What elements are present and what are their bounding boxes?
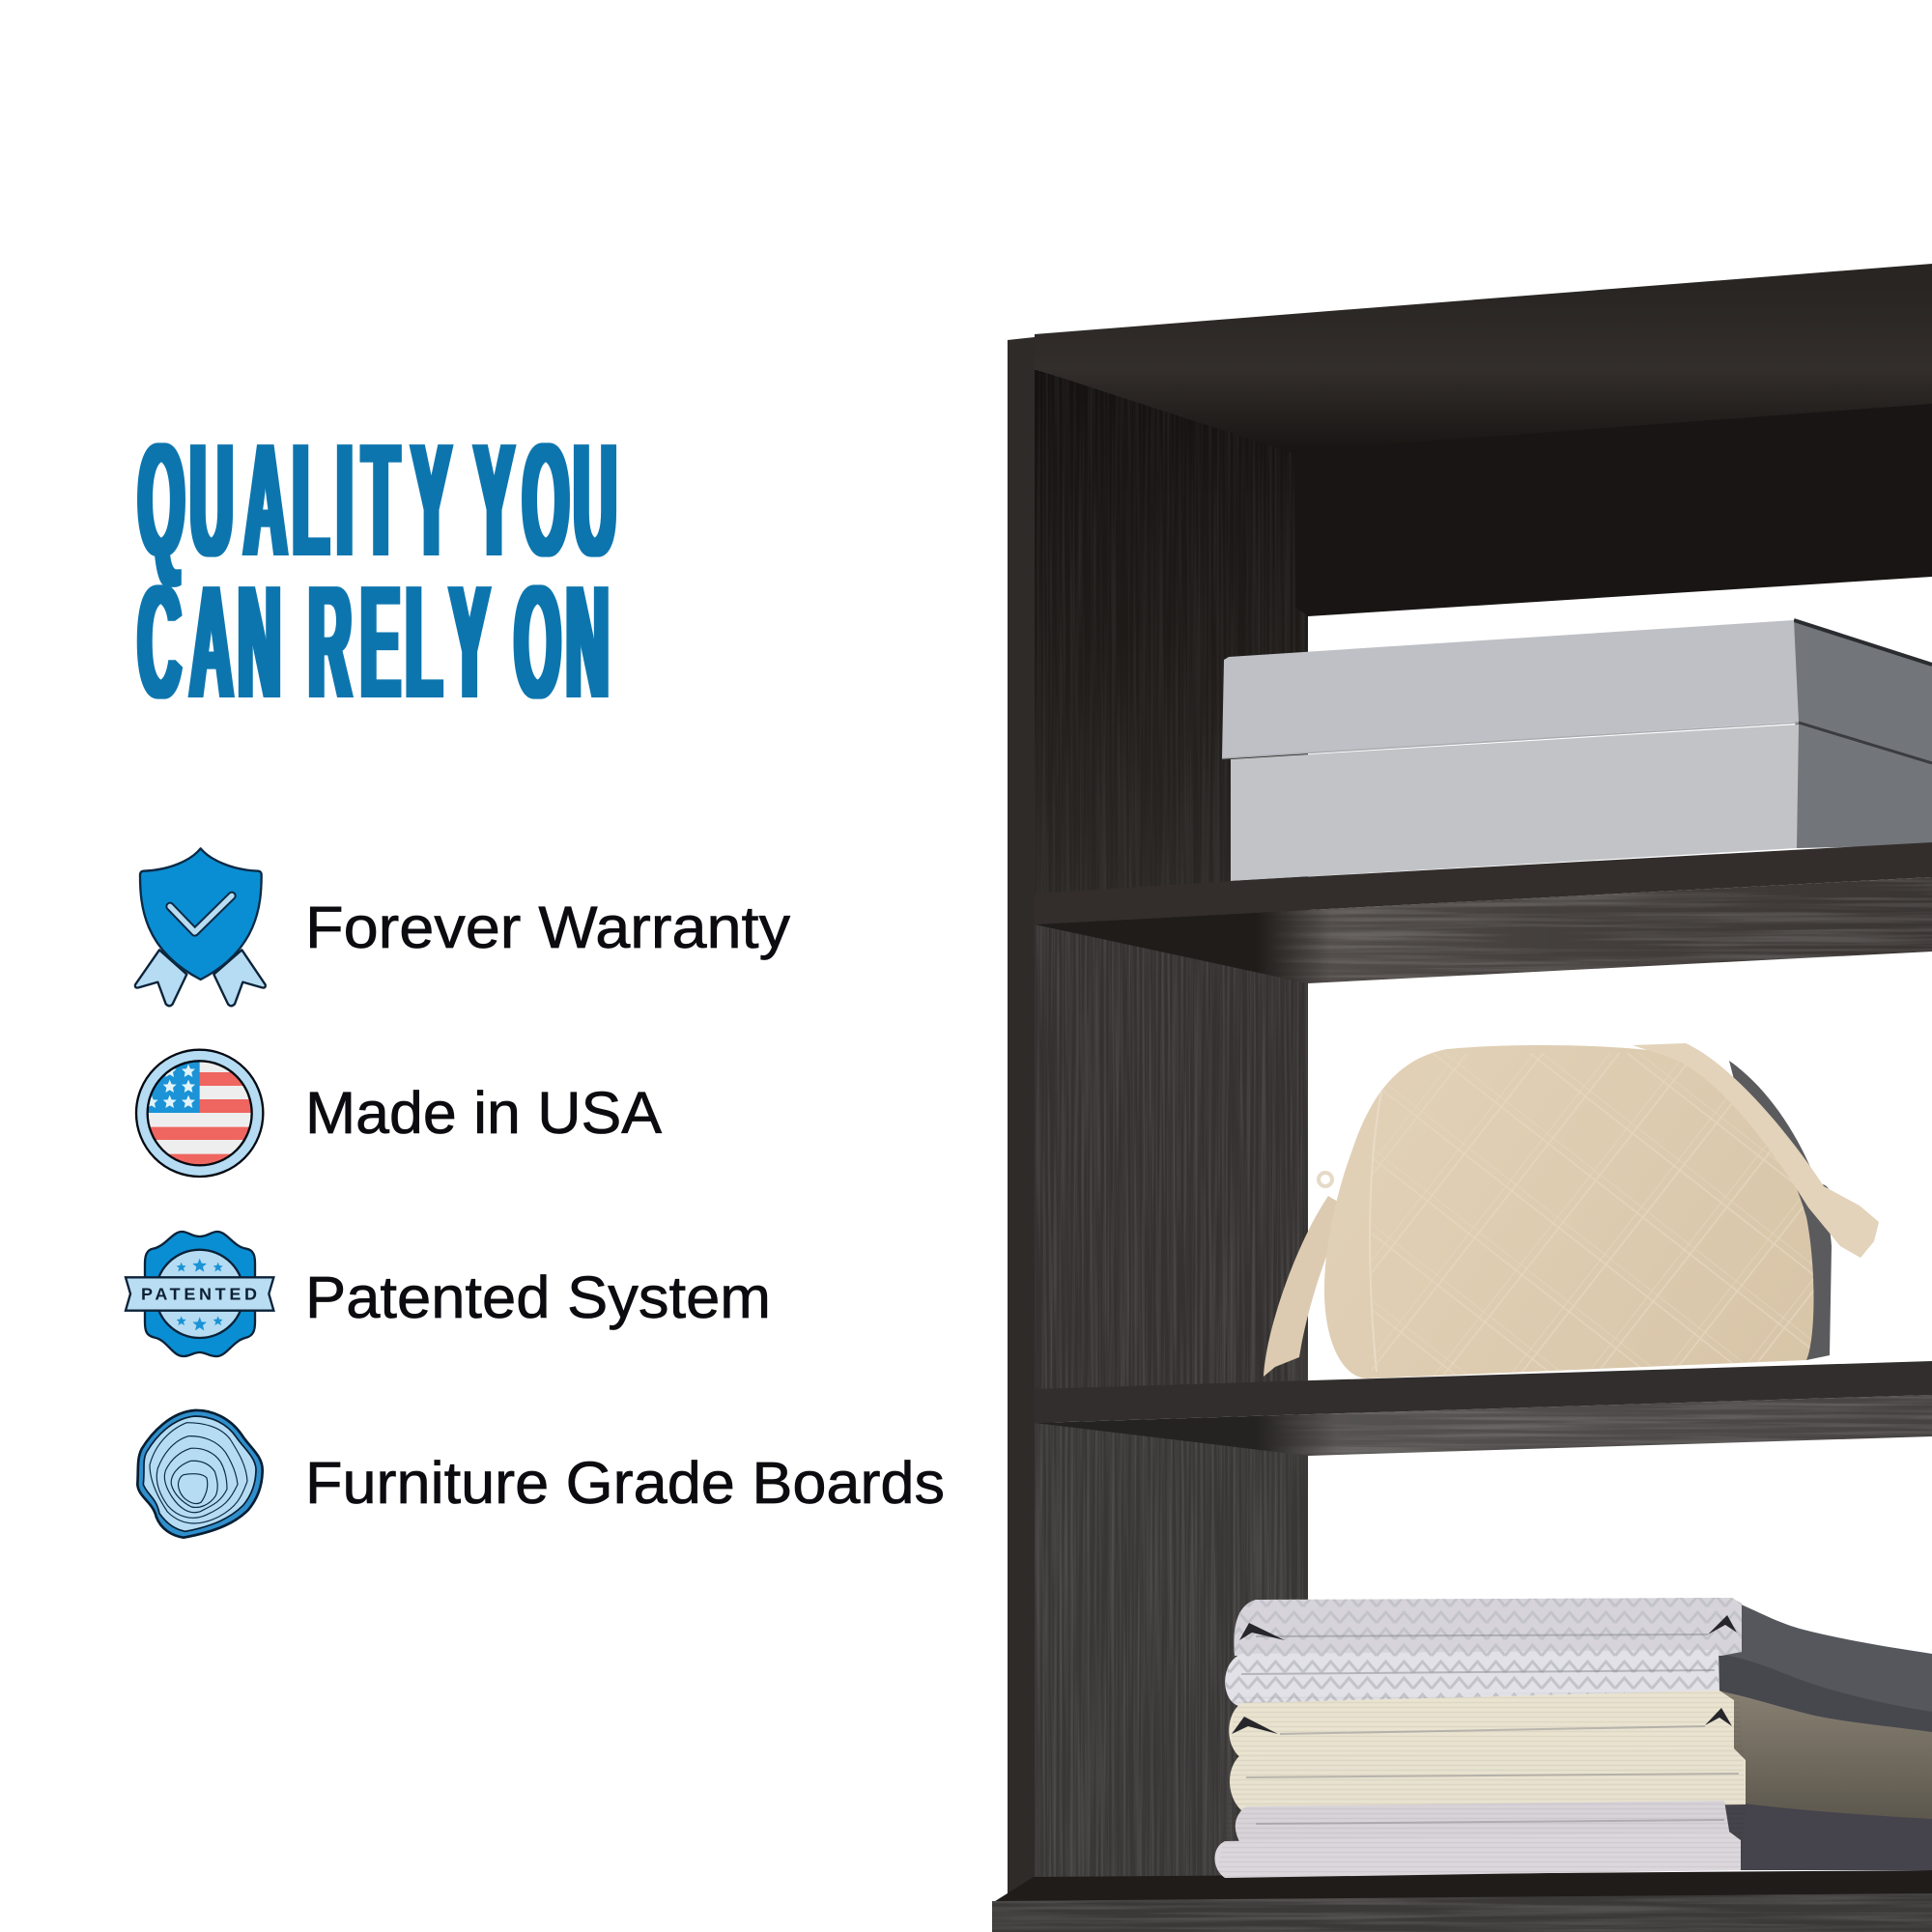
outer upright (1008, 337, 1035, 1903)
top board (1035, 264, 1932, 454)
wood grain (992, 869, 1932, 1932)
handbag (1264, 1043, 1879, 1381)
rear back rail (1295, 404, 1932, 616)
base board (992, 1870, 1932, 1932)
shelf one (1035, 842, 1932, 983)
icon: american flag (136, 1050, 263, 1177)
title: CAN RELY ON (138, 552, 609, 732)
icon: warranty shield (135, 848, 266, 1006)
title (138, 410, 616, 732)
warranty label: Forever Warranty (305, 895, 791, 960)
icon: patented badge (126, 1232, 273, 1356)
shoe box (1222, 620, 1932, 881)
feature list (126, 848, 945, 1538)
shelving unit with items (992, 264, 1932, 1932)
patented label: Patented System (305, 1264, 771, 1330)
folded towels (1215, 1598, 1932, 1878)
icon: patented badge: PATENTED (141, 1284, 257, 1303)
side panel (1035, 369, 1308, 1893)
made in usa label: Made in USA (305, 1080, 662, 1146)
furniture grade label: Furniture Grade Boards (305, 1450, 945, 1516)
title: QUALITY YOU (138, 410, 616, 590)
icon: wood rings (137, 1410, 263, 1538)
shelf two (1035, 1361, 1932, 1456)
